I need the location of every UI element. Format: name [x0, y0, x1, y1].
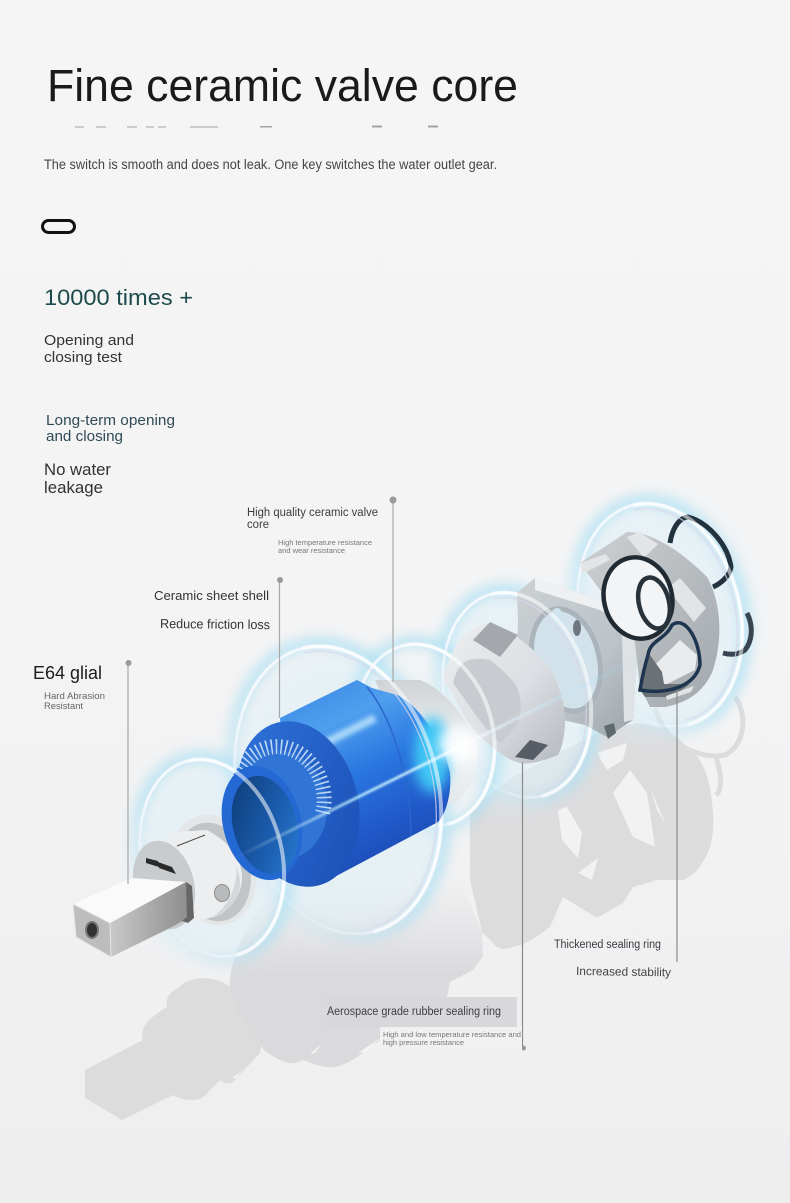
label note: hard abrasion resistant: Resistant: [44, 701, 83, 712]
text: no water leakage: No water: [44, 461, 112, 479]
title: Fine ceramic valve core: [47, 60, 518, 111]
part: ceramic cap: [443, 622, 565, 763]
grey disc behind cylinder: [375, 680, 478, 810]
front cap: [124, 834, 204, 936]
glow at end of cylinder: [414, 717, 450, 793]
pale tabs: [580, 532, 706, 700]
part: square plate: [517, 578, 638, 739]
dark lower socket: [640, 655, 690, 697]
rim: [219, 708, 377, 900]
inner grey panel: [453, 659, 521, 743]
glare at the cylinder end: [438, 727, 478, 763]
top notch: [473, 622, 518, 657]
text: long-term opening and closing: and closing: [46, 428, 123, 445]
cropped text remnants: [75, 126, 438, 128]
bottom notch: [515, 740, 548, 760]
small window: [551, 608, 563, 626]
flange disc: [158, 805, 268, 935]
light slivers in shadow: [232, 1038, 380, 1078]
white opening: [596, 551, 680, 645]
pale halo around the parts: [134, 497, 752, 958]
subtitle: The switch is smooth and does not leak. One key switches the water outlet gear.: [44, 157, 497, 172]
lavender inner lines: [304, 492, 759, 927]
outer loose ring lobe: [723, 613, 751, 654]
lower opening: [655, 640, 697, 685]
label: high quality ceramic valve core: core: [247, 519, 269, 531]
central hole: [521, 602, 611, 718]
ring white strokes: [120, 486, 765, 972]
bore: [222, 769, 308, 881]
label: aerospace grade rubber sealing ring: [327, 997, 517, 1027]
ring shadow loops: [655, 697, 743, 795]
text: opening and closing test: Opening and: [44, 332, 134, 349]
label note: hard abrasion resistant: Hard Abrasion: [44, 691, 105, 702]
part: back housing with seals: [580, 517, 751, 707]
neck ring: [210, 757, 314, 889]
plate top edge: [535, 578, 620, 620]
stat: 10000 times: 10000 times +: [44, 285, 193, 310]
label: ceramic sheet shell: Ceramic sheet shell: [154, 588, 269, 603]
label: increased stability: Increased stability: [576, 964, 671, 979]
outer loose o-ring: [670, 517, 731, 587]
part: blue cylinder: [210, 680, 478, 900]
large black o-ring: [595, 550, 681, 646]
label note: high temperature resistance: and wear resistance: [278, 546, 345, 555]
highlight band: [327, 718, 375, 742]
cylinder body: [280, 680, 450, 883]
label: thickened sealing ring: Thickened sealing ring: [554, 939, 661, 951]
stem top face: [73, 878, 186, 923]
floor shadow of the exploded valve core: [85, 697, 743, 1120]
ring glow: [115, 482, 769, 976]
body step line: [367, 687, 411, 835]
part: square stem and flange: [73, 805, 268, 957]
energy rings in front of the parts: [188, 486, 765, 955]
lower seal: [640, 623, 700, 691]
text: long-term opening and closing: Long-term opening: [46, 412, 175, 429]
white collar: [150, 830, 242, 923]
side pin: [214, 884, 230, 902]
label: reduce friction loss: Reduce friction loss: [160, 616, 271, 632]
dark stem socket: [182, 882, 194, 923]
bottom lug: [604, 723, 616, 739]
collar slots: [146, 858, 176, 874]
leader lines: [128, 500, 677, 1048]
right shadow: [470, 723, 713, 949]
energy rings behind the parts: [115, 482, 769, 976]
text: no water leakage: leakage: [44, 479, 103, 497]
central light streak: [235, 655, 645, 858]
stem end hole: [86, 922, 98, 938]
stem front face: [73, 904, 111, 957]
label note: high temperature resistance: High temperature resistance: [278, 538, 372, 547]
label: E64 glial: E64 glial: [33, 663, 102, 683]
stem shadow: [85, 978, 261, 1120]
plate right edge: [622, 636, 638, 722]
label: aerospace grade rubber sealing ring: Aerospace grade rubber sealing ring: [327, 1006, 501, 1018]
toothed band: [215, 739, 339, 871]
leader dots: [126, 496, 526, 1050]
label note: high and low temperature resistance: high pressure resistance: [383, 1038, 464, 1047]
pill icon: [42, 220, 74, 232]
central blob shadow: [230, 880, 483, 1067]
label: high quality ceramic valve core: High quality ceramic valve: [247, 507, 378, 519]
text: opening and closing test: closing test: [44, 349, 123, 366]
stem side face: [110, 882, 188, 957]
label note: high and low temperature resistance: [380, 1027, 522, 1050]
teeth: [232, 737, 329, 833]
small black o-ring: [633, 574, 675, 632]
second window: [573, 620, 581, 636]
label note: high and low temperature resistance: High and low temperature resistance and: [383, 1030, 521, 1039]
front arcs, soft white: [188, 486, 765, 955]
